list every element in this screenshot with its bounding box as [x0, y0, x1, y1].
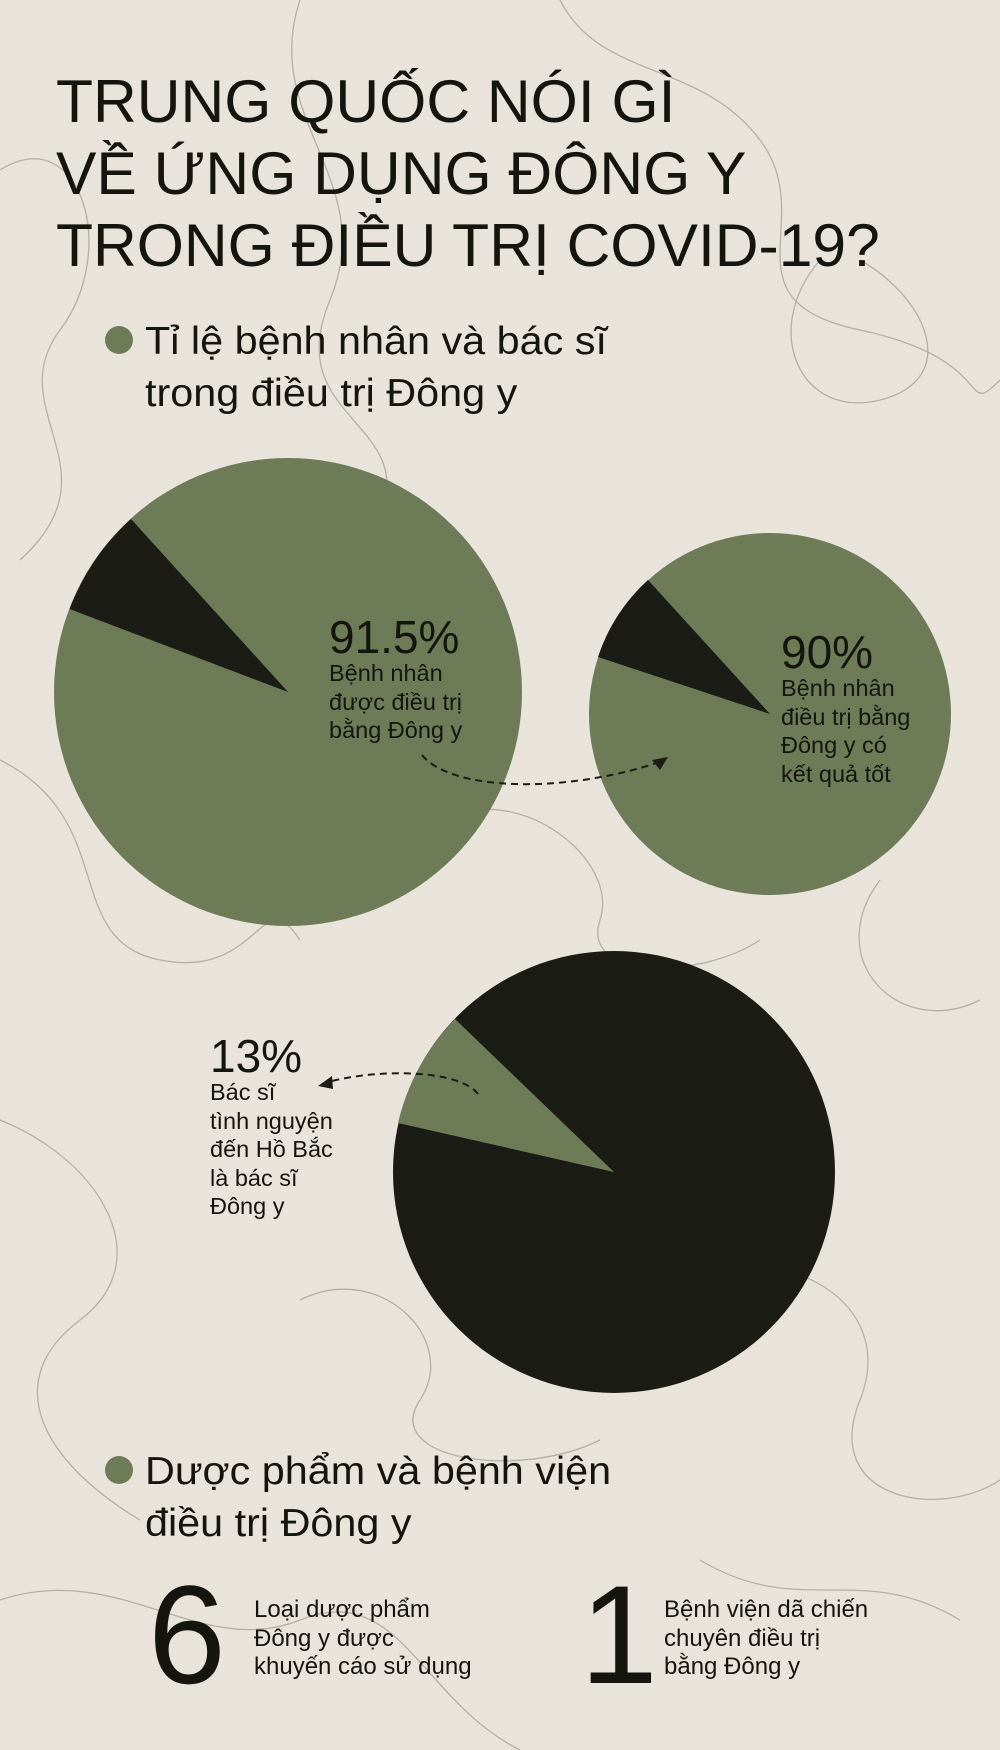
stat: 90%: Đông y có [781, 732, 887, 758]
heading: section 1: trong điều trị Đông y [145, 372, 517, 415]
heading: section 1: Tỉ lệ bệnh nhân và bác sĩ [145, 320, 607, 363]
stat: 13%: Bác sĩ [210, 1079, 275, 1105]
stat: 13%: 13% [210, 1030, 302, 1082]
stat: 91.5%: được điều trị [329, 688, 462, 714]
stat: 13%: là bác sĩ [210, 1164, 298, 1190]
pie chart: 91.5% [54, 458, 522, 926]
stat: 91.5%: Bệnh nhân [329, 660, 443, 686]
stat: 90%: Bệnh nhân [781, 675, 895, 701]
stat: 1 hospital: Bệnh viện dã chiến [664, 1596, 868, 1623]
bullet dot [105, 1456, 133, 1484]
stat: 6 medicines: Loại dược phẩm [254, 1596, 430, 1623]
stat: 90% [781, 626, 910, 787]
heading: section 2 [105, 1450, 611, 1545]
stat: 13%: Đông y [210, 1193, 284, 1219]
stat: 6 medicines: 6 [148, 1556, 226, 1713]
stat: 91.5% [329, 611, 462, 743]
stat: 6 medicines: Đông y được [254, 1624, 394, 1652]
stat: 90%: 90% [781, 626, 873, 678]
arrow: 91.5% to 90% [421, 754, 668, 786]
stat: 6 medicines: khuyến cáo sử dụng [254, 1653, 472, 1680]
stat: 1 hospital [580, 1556, 868, 1713]
arrow: pie to 13% [318, 1072, 479, 1094]
stat: 1 hospital: 1 [580, 1556, 658, 1713]
pie chart: 13% [393, 951, 835, 1393]
stat: 1 hospital: chuyên điều trị [664, 1624, 820, 1652]
title: TRUNG QUỐC NÓI GÌ [56, 68, 675, 135]
stat: 13%: tình nguyện [210, 1108, 333, 1134]
heading: section 2: Dược phẩm và bệnh viện [145, 1450, 611, 1493]
stat: 91.5%: 91.5% [329, 611, 459, 663]
stat: 1 hospital: bằng Đông y [664, 1653, 800, 1680]
pie chart: 90% [589, 533, 951, 895]
stat: 90%: điều trị bằng [781, 704, 910, 730]
stat: 13% [210, 1030, 333, 1219]
title: VỀ ỨNG DỤNG ĐÔNG Y [56, 140, 746, 207]
heading: section 1 [105, 320, 608, 415]
stat: 90%: kết quả tốt [781, 760, 891, 786]
title [56, 68, 880, 279]
bullet dot [105, 326, 133, 354]
stat: 91.5%: bằng Đông y [329, 717, 462, 743]
stat: 13%: đến Hồ Bắc [210, 1136, 333, 1162]
title: TRONG ĐIỀU TRỊ COVID-19? [56, 212, 880, 279]
heading: section 2: điều trị Đông y [145, 1502, 412, 1545]
stat: 6 medicines [148, 1556, 472, 1713]
